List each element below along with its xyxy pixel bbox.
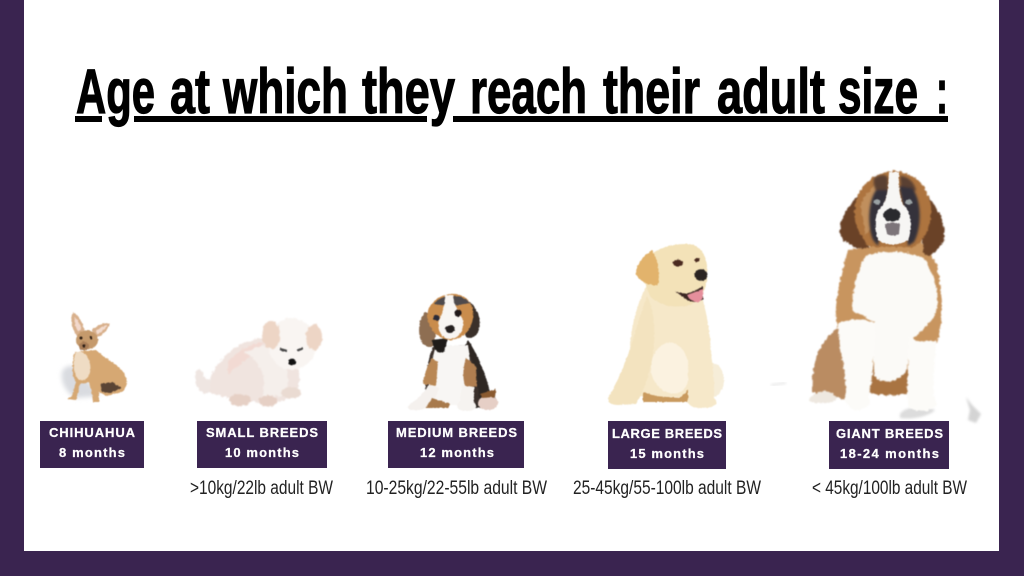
text: small breed weight: >10kg/22lb adult BW	[190, 478, 333, 499]
title: they	[362, 57, 455, 127]
title: which	[222, 57, 348, 127]
label: chihuahua	[40, 421, 144, 468]
text: medium breed weight: 10-25kg/22-55lb adult BW	[366, 478, 547, 499]
icon: chihuahua	[62, 312, 127, 402]
label: small breeds: 10 months	[225, 445, 299, 460]
label: giant breeds: GIANT BREEDS	[836, 426, 943, 441]
label: large breeds	[608, 421, 726, 469]
label: large breeds: LARGE BREEDS	[612, 426, 722, 441]
title: size	[838, 57, 918, 127]
icon: large breed labrador	[608, 244, 724, 408]
title	[75, 57, 948, 127]
title: at	[170, 57, 210, 127]
label: medium breeds: MEDIUM BREEDS	[396, 425, 517, 440]
label: small breeds: SMALL BREEDS	[206, 425, 318, 440]
icon: giant breed saint bernard	[771, 171, 981, 423]
title: their	[603, 57, 700, 127]
label: giant breeds	[829, 421, 949, 469]
title: adult	[717, 57, 825, 127]
label: chihuahua: CHIHUAHUA	[49, 425, 136, 440]
label: giant breeds: 18-24 months	[840, 446, 939, 461]
title: Age	[76, 57, 155, 127]
label: chihuahua: 8 months	[59, 445, 125, 460]
label: small breeds	[197, 421, 327, 468]
label: medium breeds: 12 months	[420, 445, 494, 460]
title: :	[936, 57, 948, 127]
label: large breeds: 15 months	[630, 446, 704, 461]
icon: small breed face	[280, 348, 303, 365]
icon: medium breed beagle	[408, 294, 498, 411]
label: medium breeds	[388, 421, 524, 468]
text: large breed weight: 25-45kg/55-100lb adult BW	[573, 478, 761, 499]
text: giant breed weight: < 45kg/100lb adult BW	[812, 478, 967, 499]
title: reach	[470, 57, 587, 127]
icon: small breed puppy	[195, 318, 322, 406]
